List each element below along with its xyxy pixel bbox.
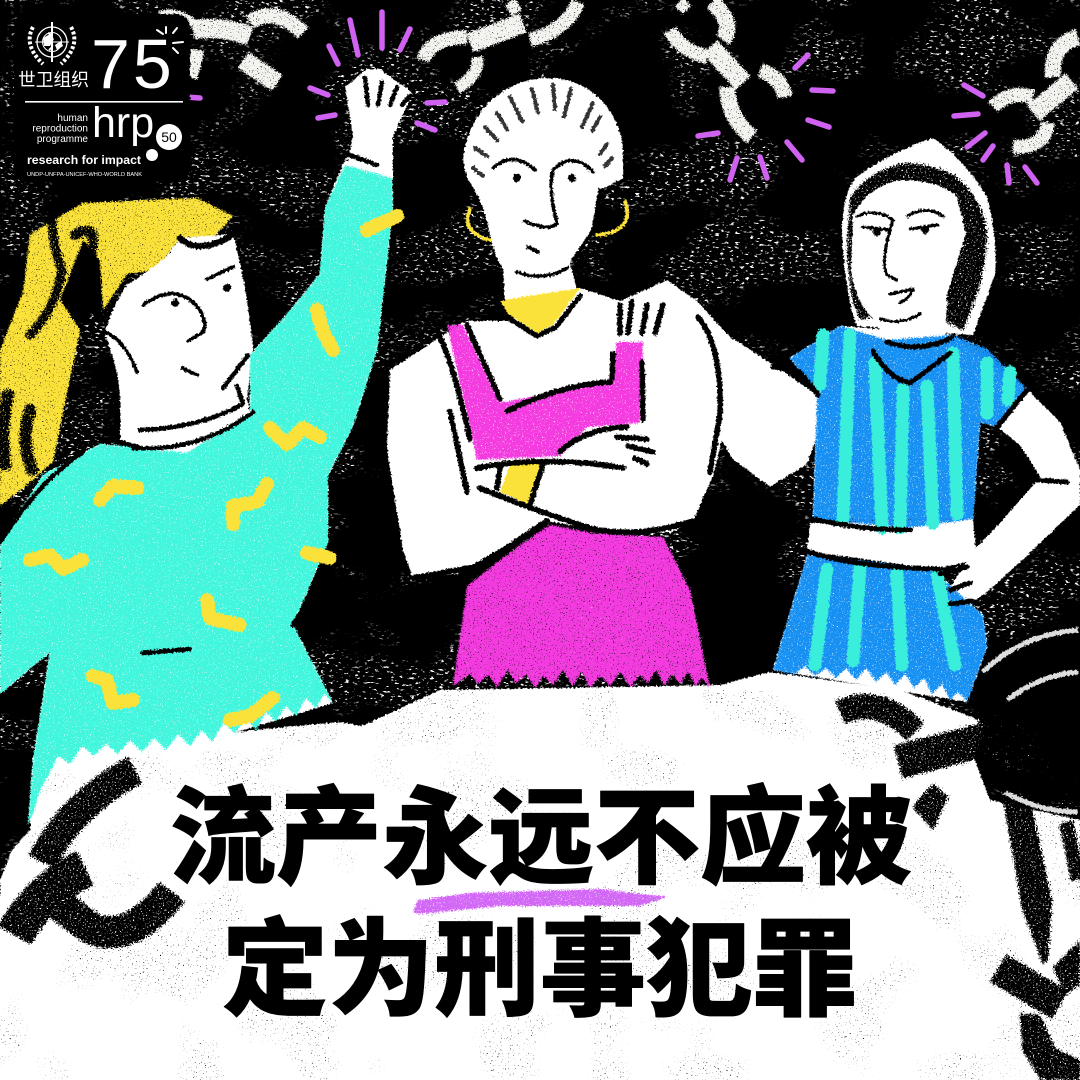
WHO name: 世卫组织 [18, 70, 89, 90]
blue skirt [773, 555, 987, 702]
purple sparks around middle chain [698, 55, 833, 180]
logo block backdrop [14, 14, 190, 182]
white backing of dress [773, 326, 1028, 702]
headline line 1: 流产永远不应被 [170, 780, 912, 898]
white backing of sweater [0, 160, 393, 825]
icon: rays [157, 27, 183, 53]
hand [345, 69, 413, 180]
face and neck [105, 234, 253, 458]
blue top [790, 326, 1028, 528]
dark hair [847, 163, 987, 330]
blonde hair [0, 198, 233, 506]
programme name: reproduction [32, 124, 88, 134]
partners: UNDP-UNFPA-UNICEF-WHO-WORLD BANK [27, 172, 143, 178]
logos: WHO 75 and HRP 50 [18, 22, 183, 178]
purple sparks around raised fist [186, 12, 445, 130]
hrp dot [146, 149, 158, 161]
white torn paper area at bottom [0, 672, 1080, 1080]
yellow squiggles on sweater [30, 216, 397, 720]
yellow collar [498, 288, 580, 333]
50 badge: 50 [161, 129, 177, 145]
left figure: blonde woman with raised fist [0, 69, 413, 825]
headline line 2: 定为刑事犯罪 [222, 912, 858, 1030]
broken black chain, bottom right [840, 620, 1080, 1080]
black specks on white area [0, 690, 1080, 1080]
right figure: woman in blue dress [773, 138, 1080, 702]
headline [170, 780, 912, 1030]
hrp wordmark: hrp [92, 99, 154, 147]
face [851, 180, 966, 340]
magenta skirt [453, 525, 710, 688]
broken black chain, bottom left [14, 770, 172, 935]
face and sweater lines [0, 78, 410, 653]
purple underline stroke [413, 889, 668, 914]
programme name: human [57, 113, 88, 124]
dark hair strands [3, 205, 108, 470]
gold earrings [468, 201, 627, 240]
programme name: programme [37, 134, 88, 145]
yellow wrist band [500, 464, 540, 505]
50 badge [156, 124, 182, 150]
divider line [25, 101, 183, 103]
head [463, 78, 623, 305]
face and hair lines [413, 84, 720, 578]
tagline: research for impact [27, 153, 141, 167]
white midriff [807, 519, 977, 569]
center figure: woman with crossed arms [387, 78, 817, 688]
teal stripes [815, 335, 1010, 665]
body and arms [387, 280, 817, 578]
magenta dress top [447, 325, 643, 460]
75 anniversary mark: 75 [91, 25, 175, 103]
purple sparks around right chain [954, 85, 1037, 183]
white arm on hip [947, 390, 1080, 606]
white head outline [842, 138, 996, 335]
programme name [32, 113, 88, 145]
white chains at the top [160, 2, 1078, 147]
teal sweater [0, 165, 393, 825]
face and dress lines [773, 210, 1067, 604]
icon: WHO emblem [30, 22, 74, 64]
